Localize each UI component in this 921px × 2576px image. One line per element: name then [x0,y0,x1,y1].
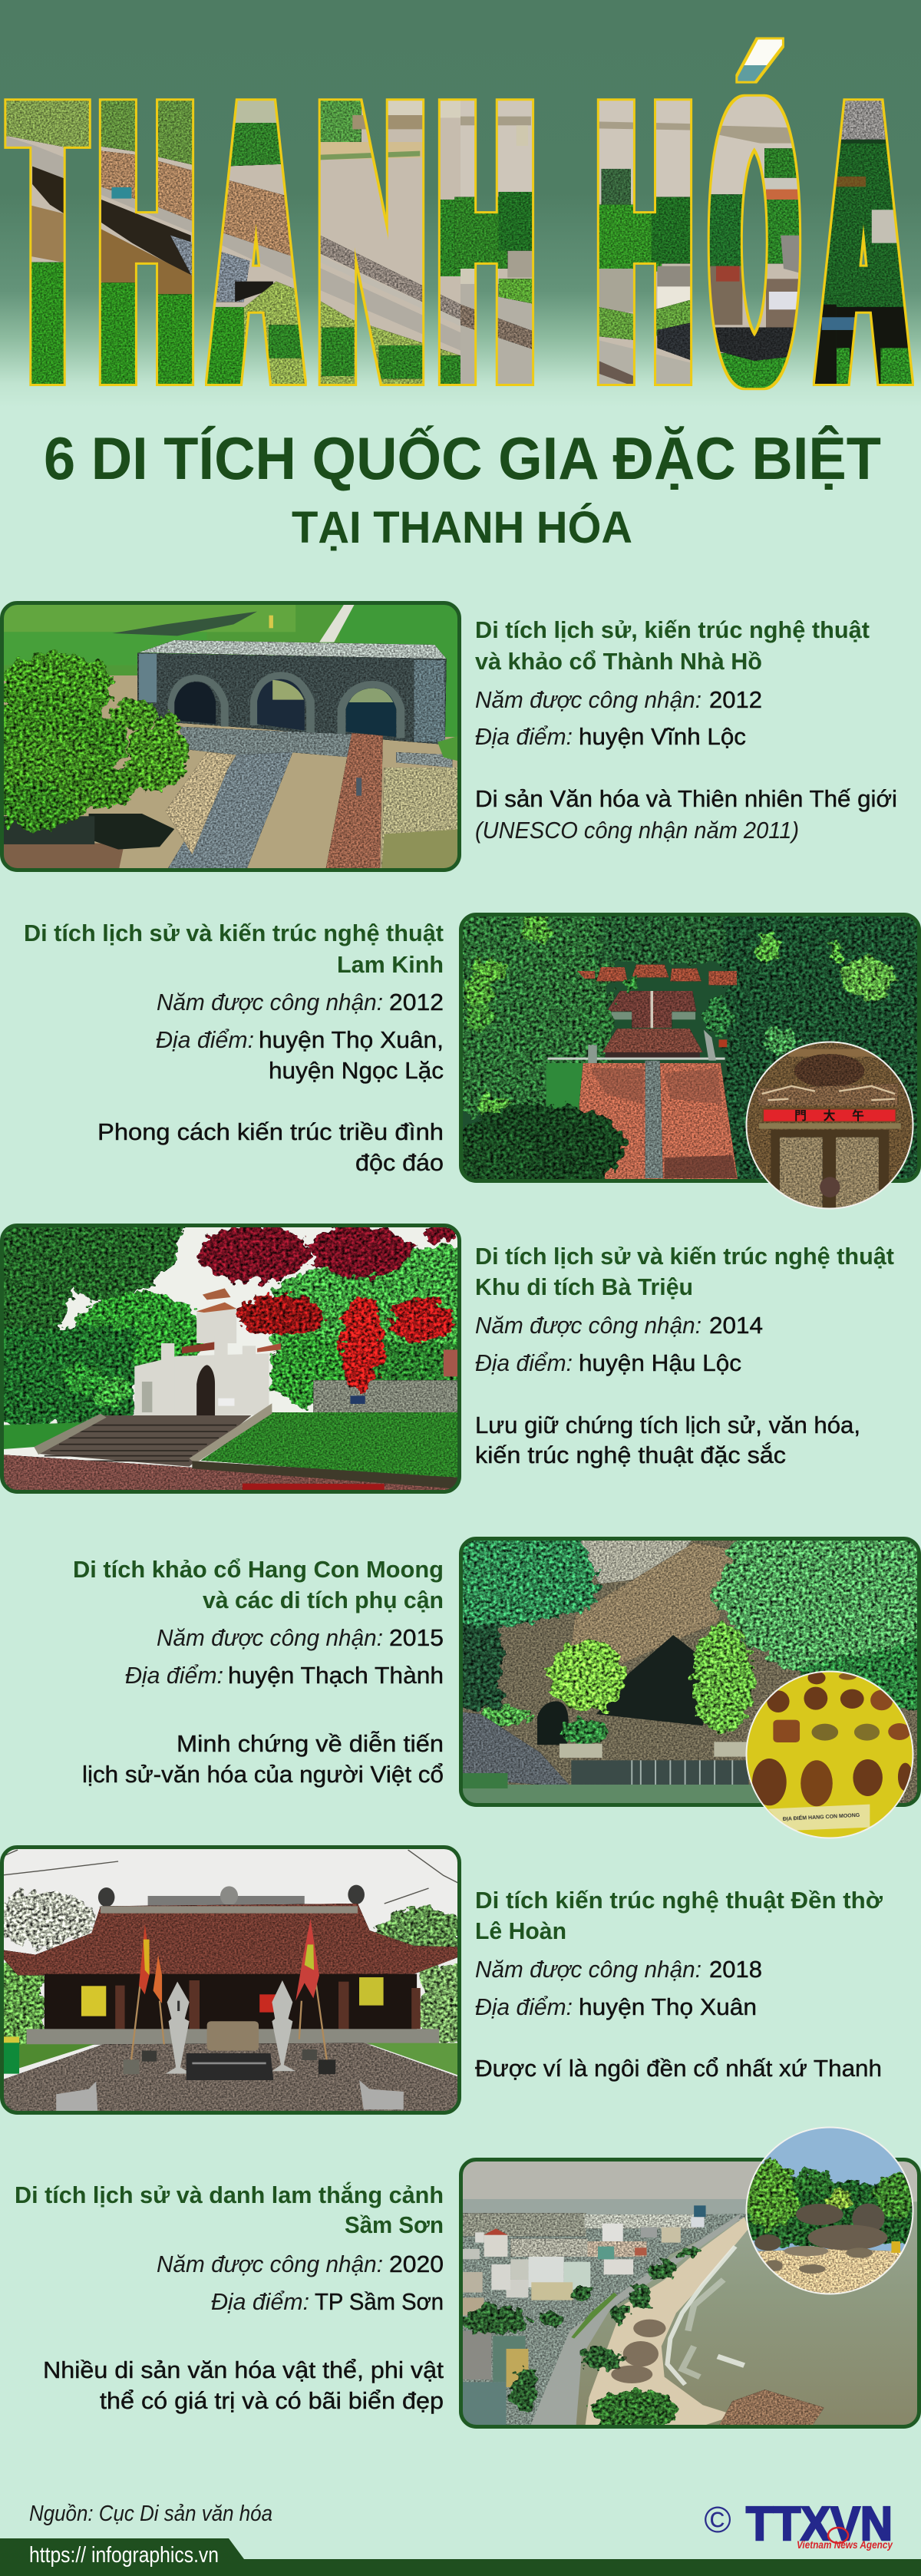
panel: Bà Triệu [0,1210,894,1497]
location [125,1662,444,1689]
heading: Sầm Sơn [345,2211,444,2238]
heading: Di tích khảo cổ Hang Con Moong [73,1556,444,1583]
location: huyện Thọ Xuân [579,1993,757,2020]
location: huyện Ngọc Lặc [269,1057,444,1084]
location: huyện Thọ Xuân, [259,1026,444,1053]
recognition year: Năm được công nhận: [475,1956,701,1983]
recognition year: Năm được công nhận: [157,2251,383,2277]
recognition year: 2020 [389,2251,444,2277]
location: Địa điểm: [156,1026,254,1053]
heading: Lê Hoàn [475,1917,566,1944]
title letter yellow outline: A [820,11,907,471]
note: thể có giá trị và có bãi biển đẹp [100,2387,444,2414]
headline: 6 DI TÍCH QUỐC GIA ĐẶC BIỆT [44,424,881,492]
note [475,1412,860,1468]
heading [475,1887,883,1944]
location [475,1993,757,2020]
note: Lưu giữ chứng tích lịch sử, văn hóa, [475,1412,860,1438]
location: huyện Thạch Thành [228,1662,444,1689]
location: huyện Vĩnh Lộc [579,723,746,750]
recognition year: Năm được công nhận: [475,1312,701,1339]
note: kiến trúc nghệ thuật đặc sắc [475,1442,786,1468]
location [211,2288,444,2315]
title letter yellow outline: A [212,12,300,471]
photo: Lam Kinh aerial [463,916,917,1179]
sub-headline: TẠI THANH HÓA [292,503,632,553]
title letter yellow outline: T [13,12,82,471]
photo: Lê Hoàn temple [0,1842,476,2119]
heading [24,920,444,978]
title letter yellow outline: H [599,13,691,472]
note [82,1730,444,1788]
recognition year: 2018 [709,1956,762,1983]
note [97,1118,444,1176]
heading: và các di tích phụ cận [203,1587,444,1613]
heading: Di tích lịch sử, kiến trúc nghệ thuật [475,616,870,643]
title letter yellow outline: N [319,13,424,472]
panel: Thành Nhà Hồ [0,599,897,875]
location [475,1349,741,1376]
inset circle: rocks and trees [735,2126,921,2297]
gate plaque characters: 門大午 [794,1108,864,1123]
note [475,785,897,844]
artefact label: ĐỊA ĐIỂM HANG CON MOONG [783,1811,860,1822]
title letter yellow outline [13,0,907,472]
location: Địa điểm: [475,1993,573,2020]
title letter photo fill: bridge and river [6,40,912,388]
source note: Nguồn: Cục Di sản văn hóa [29,2502,272,2526]
photo frame [460,2160,919,2427]
location: Địa điểm: [125,1662,223,1689]
panel: Lam Kinh [24,900,921,1214]
heading: Lam Kinh [337,951,444,978]
photo frame [460,915,919,1181]
recognition year: 2012 [389,989,444,1016]
title letter yellow outline: H [440,12,533,472]
inset circle: stone artefacts [744,1669,915,1840]
location: Địa điểm: [475,1349,573,1376]
location: Địa điểm: [211,2288,309,2315]
location: Địa điểm: [475,723,573,750]
heading: Khu di tích Bà Triệu [475,1273,693,1300]
photo: Thành Nhà Hồ citadel gate [0,599,464,875]
recognition year: Năm được công nhận: [157,989,383,1016]
heading [475,616,870,675]
photo frame [2,603,459,870]
photo: Sầm Sơn beach aerial [457,2158,921,2432]
recognition year: Năm được công nhận: [157,1624,383,1651]
note: Phong cách kiến trúc triều đình [97,1118,444,1145]
title: THANH HÓA photo-filled letters [4,37,914,390]
note: Được ví là ngôi đền cổ nhất xứ Thanh [475,2055,882,2082]
heading: Di tích kiến trúc nghệ thuật Đền thờ [475,1887,883,1914]
panel: Hang Con Moong [73,1525,921,1840]
title letter yellow outline: ´ [732,0,787,292]
panel: Sầm Sơn [15,2126,921,2432]
inset circle: carved wooden gate [741,1038,919,1214]
note: (UNESCO công nhận năm 2011) [475,817,799,844]
heading: và khảo cổ Thành Nhà Hồ [475,648,762,675]
panel: Lê Hoàn [0,1842,883,2119]
photo frame [2,1225,459,1492]
copyright symbol: © [704,2500,731,2541]
recognition year: 2014 [709,1312,763,1339]
note: độc đáo [355,1149,444,1176]
website url: https:// infographics.vn [29,2543,219,2568]
recognition year: 2015 [389,1624,444,1651]
heading: Di tích lịch sử và kiến trúc nghệ thuật [24,920,444,946]
note: Minh chứng về diễn tiến [177,1730,444,1757]
heading: Di tích lịch sử và danh lam thắng cảnh [15,2181,444,2208]
bridge truss [101,151,291,256]
note: Nhiều di sản văn hóa vật thể, phi vật [43,2356,444,2383]
photo: Bà Triệu temple gate [4,1227,457,1490]
agency mark: TTXVN [746,2498,893,2551]
heading [15,2181,444,2238]
location: huyện Hậu Lộc [579,1349,741,1376]
footer bar [0,2538,921,2576]
heading [475,1243,894,1300]
photo frame [460,1538,919,1805]
title letter yellow outline: O [713,12,796,471]
logo: TTXVN [704,2498,893,2551]
heading [73,1556,444,1613]
globe swoosh [828,2528,848,2543]
note: lịch sử-văn hóa của người Việt cổ [82,1761,444,1788]
location: TP Sầm Sơn [315,2288,444,2315]
title letter yellow outline: H [101,13,193,472]
note [43,2356,444,2414]
agency name: Vietnam News Agency [797,2538,893,2551]
note: Di sản Văn hóa và Thiên nhiên Thế giới [475,785,897,812]
photo frame [2,1847,459,2112]
location [475,723,746,750]
recognition year: Năm được công nhận: [475,686,701,713]
photo: Con Moong cave [463,1541,917,1803]
heading: Di tích lịch sử và kiến trúc nghệ thuật [475,1243,894,1270]
location [156,1026,444,1084]
recognition year: 2012 [709,686,762,713]
